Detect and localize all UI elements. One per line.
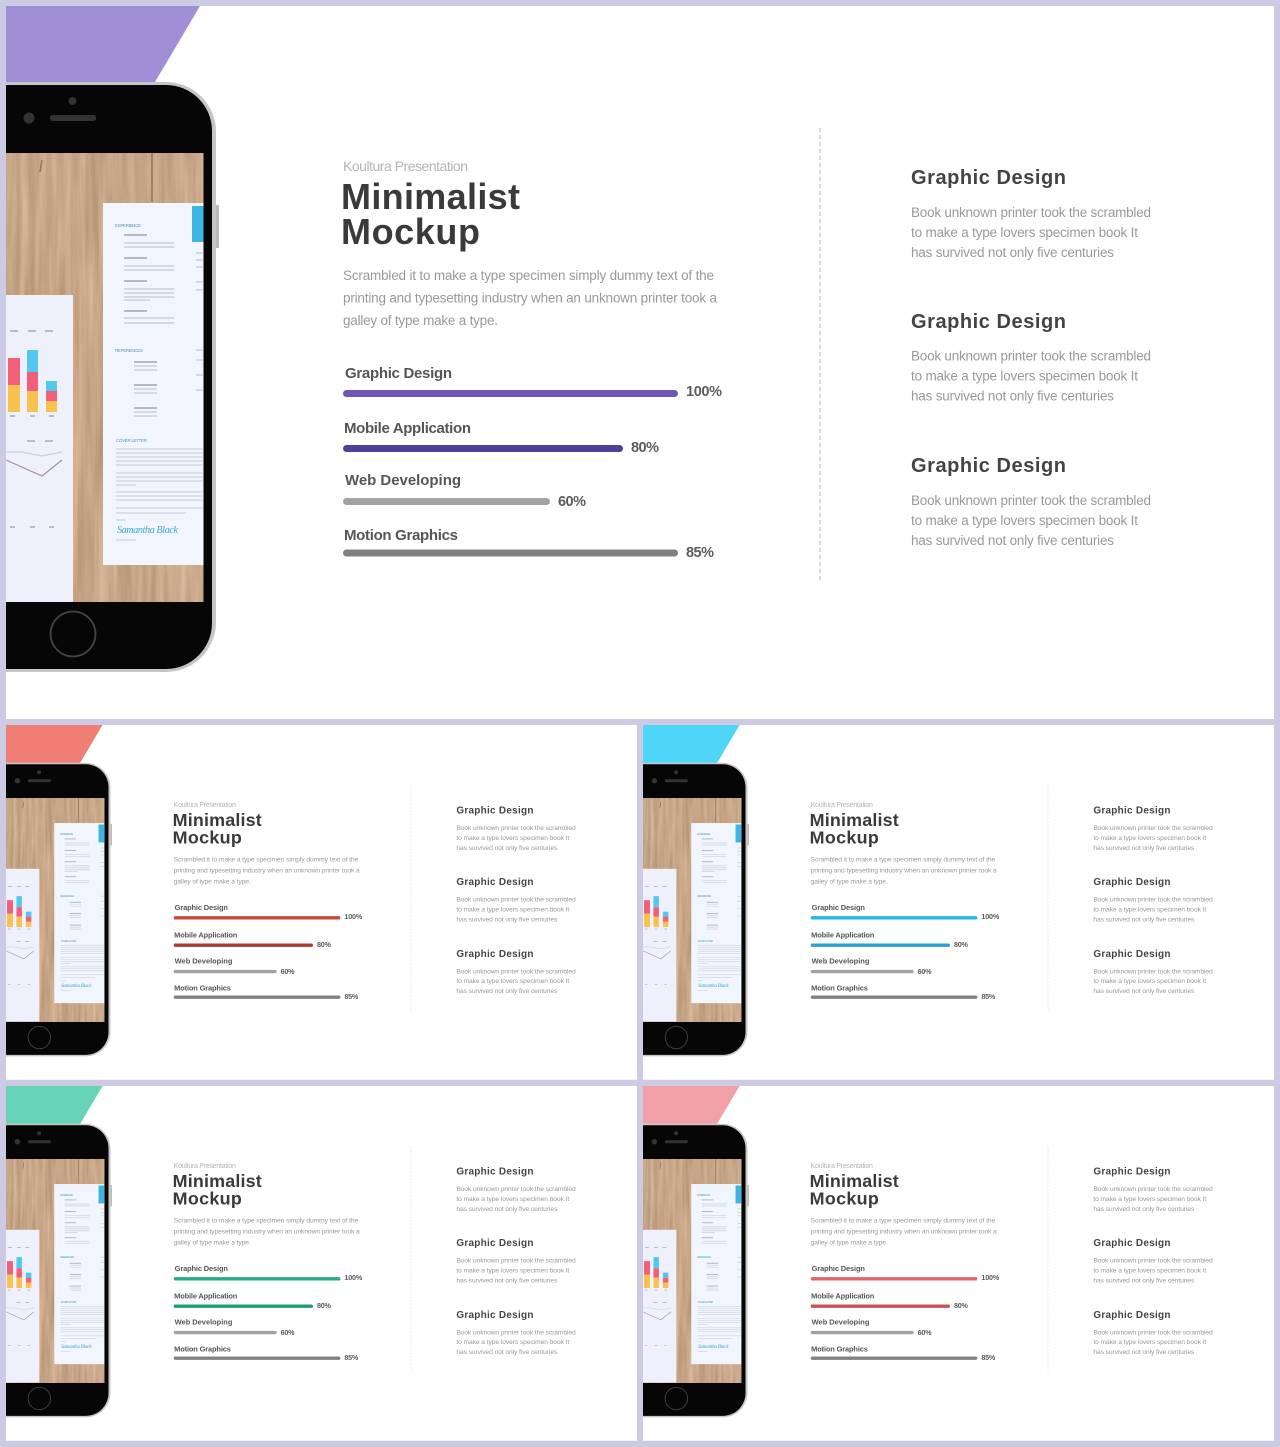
bar: Motion Graphics 85%: Motion Graphics bbox=[811, 984, 868, 993]
text block 3: Book unknown printer took the scrambled bbox=[1093, 1329, 1213, 1336]
bar: Mobile Application 80%: 80% bbox=[317, 1301, 332, 1310]
text block 2: to make a type lovers specimen book It bbox=[911, 368, 1138, 384]
bar: Web Developing 60%: Web Developing bbox=[175, 1317, 233, 1326]
bar: Graphic Design 100%: 100% bbox=[344, 912, 363, 921]
text block 3: Graphic Design bbox=[456, 1310, 533, 1321]
bar: Web Developing 60%: Web Developing bbox=[345, 472, 461, 489]
title bbox=[173, 1171, 262, 1208]
bar: Web Developing 60%: 60% bbox=[281, 967, 295, 976]
intro paragraph bbox=[343, 268, 717, 328]
icon: phone mockup: EXPERIENCE bbox=[60, 1195, 74, 1197]
eyebrow: Koultura Presentation bbox=[174, 802, 236, 809]
text block 1: to make a type lovers specimen book It bbox=[456, 1196, 569, 1203]
bar: Mobile Application 80%: Mobile Application bbox=[174, 930, 238, 939]
bar: Graphic Design 100%: Graphic Design bbox=[175, 903, 228, 912]
text block 2: Graphic Design bbox=[456, 877, 533, 888]
text block 2: has survived not only five centuries bbox=[1093, 1277, 1195, 1284]
text block 3: to make a type lovers specimen book It bbox=[911, 513, 1138, 528]
text block 2 bbox=[456, 1238, 576, 1284]
icon: phone mockup: EXPERIENCE bbox=[60, 834, 74, 836]
icon: phone mockup: Samantha Black bbox=[117, 525, 179, 536]
bar: Motion Graphics 85% bbox=[811, 1345, 996, 1362]
text block 1 bbox=[456, 1167, 576, 1213]
text block 2: Graphic Design bbox=[911, 311, 1066, 333]
icon: phone mockup: EXPERIENCE bbox=[697, 834, 711, 836]
icon: phone mockup: REFERENCES bbox=[60, 896, 75, 898]
icon: phone mockup: COVER LETTER bbox=[61, 941, 77, 943]
title: Mockup bbox=[810, 1188, 879, 1208]
text block 2 bbox=[1093, 877, 1213, 923]
icon: phone mockup: Samantha Black bbox=[698, 1345, 729, 1350]
intro paragraph: galley of type make a type. bbox=[343, 313, 498, 328]
text block 1: Book unknown printer took the scrambled bbox=[911, 205, 1151, 220]
icon: phone mockup bbox=[6, 82, 219, 672]
intro paragraph: printing and typesetting industry when an unknown printer took a bbox=[811, 868, 997, 875]
title: Minimalist bbox=[173, 1171, 262, 1191]
text block 3 bbox=[1093, 1310, 1213, 1356]
bar: Mobile Application 80% bbox=[174, 1291, 332, 1310]
text block 1 bbox=[456, 806, 576, 852]
text block 2: to make a type lovers specimen book It bbox=[1093, 906, 1206, 913]
text block 1: to make a type lovers specimen book It bbox=[1093, 835, 1206, 842]
text block 3: to make a type lovers specimen book It bbox=[456, 978, 569, 985]
text block 1: Book unknown printer took the scrambled bbox=[1093, 1186, 1213, 1193]
chart: skill bars bbox=[174, 903, 363, 1001]
text block 2: Book unknown printer took the scrambled bbox=[1093, 1257, 1213, 1264]
eyebrow: Koultura Presentation bbox=[174, 1163, 236, 1170]
bar: Web Developing 60%: Web Developing bbox=[175, 956, 233, 965]
bar: Motion Graphics 85%: 85% bbox=[344, 1353, 359, 1362]
corner shape: teal bbox=[6, 1086, 103, 1124]
text block 3: Book unknown printer took the scrambled bbox=[456, 968, 576, 975]
text block 3: Book unknown printer took the scrambled bbox=[911, 493, 1151, 508]
icon: phone mockup: COVER LETTER bbox=[116, 438, 148, 443]
text block 2: has survived not only five centuries bbox=[911, 388, 1114, 404]
title: Minimalist bbox=[341, 176, 520, 217]
bar: Graphic Design 100% bbox=[811, 1264, 1000, 1282]
icon: phone mockup: REFERENCES bbox=[697, 1257, 712, 1259]
text block 2: Book unknown printer took the scrambled bbox=[456, 896, 576, 903]
intro paragraph bbox=[174, 1217, 360, 1247]
text block 3: Graphic Design bbox=[1093, 949, 1170, 960]
icon: phone mockup bbox=[643, 1124, 749, 1417]
text block 3: Graphic Design bbox=[456, 949, 533, 960]
bar: Web Developing 60% bbox=[811, 1317, 932, 1337]
bar: Graphic Design 100%: Graphic Design bbox=[175, 1264, 228, 1273]
text block 2: Book unknown printer took the scrambled bbox=[911, 348, 1151, 364]
icon: phone mockup: Samantha Black bbox=[61, 984, 92, 989]
bar: Mobile Application 80%: Mobile Application bbox=[174, 1291, 238, 1300]
icon: phone mockup: COVER LETTER bbox=[698, 941, 714, 943]
intro paragraph: Scrambled it to make a type specimen simply dummy text of the bbox=[343, 268, 714, 283]
text block 1: has survived not only five centuries bbox=[1093, 1206, 1195, 1213]
bar: Motion Graphics 85% bbox=[343, 527, 714, 561]
text block 3: Book unknown printer took the scrambled bbox=[1093, 968, 1213, 975]
text block 1: has survived not only five centuries bbox=[911, 245, 1114, 260]
bar: Mobile Application 80%: 80% bbox=[954, 940, 969, 949]
icon: phone mockup: EXPERIENCE bbox=[697, 1195, 711, 1197]
eyebrow: Koultura Presentation bbox=[343, 158, 468, 174]
text block 2 bbox=[911, 311, 1151, 404]
intro paragraph: galley of type make a type. bbox=[811, 1240, 888, 1247]
icon: phone mockup: REFERENCES bbox=[115, 348, 143, 353]
bar: Web Developing 60% bbox=[343, 472, 586, 510]
intro paragraph: galley of type make a type. bbox=[174, 1240, 251, 1247]
corner shape: pink bbox=[643, 1086, 740, 1124]
title bbox=[810, 1171, 899, 1208]
icon: phone mockup: Samantha Black bbox=[61, 1345, 92, 1350]
bar: Web Developing 60% bbox=[174, 956, 295, 976]
bar: Motion Graphics 85%: Motion Graphics bbox=[174, 1345, 231, 1354]
intro paragraph: galley of type make a type. bbox=[811, 879, 888, 886]
bar: Web Developing 60%: 60% bbox=[918, 967, 932, 976]
text block 3: has survived not only five centuries bbox=[911, 533, 1114, 548]
bar: Mobile Application 80%: 80% bbox=[317, 940, 332, 949]
panel: cyan slide bbox=[643, 725, 1274, 1080]
text block 1 bbox=[1093, 1167, 1213, 1213]
bar: Mobile Application 80%: Mobile Application bbox=[344, 420, 471, 437]
intro paragraph bbox=[174, 856, 360, 886]
bar: Motion Graphics 85%: 85% bbox=[981, 1353, 996, 1362]
text block 1: Book unknown printer took the scrambled bbox=[456, 825, 576, 832]
text block 2: has survived not only five centuries bbox=[456, 1277, 558, 1284]
text block 1: Book unknown printer took the scrambled bbox=[1093, 825, 1213, 832]
bar: Graphic Design 100% bbox=[343, 365, 722, 400]
title bbox=[810, 810, 899, 847]
bar: Motion Graphics 85%: 85% bbox=[981, 992, 996, 1001]
intro paragraph: Scrambled it to make a type specimen simply dummy text of the bbox=[811, 1217, 996, 1224]
text block 2: Graphic Design bbox=[1093, 877, 1170, 888]
chart: skill bars bbox=[811, 1264, 1000, 1362]
text block 1 bbox=[1093, 806, 1213, 852]
text block 3: Book unknown printer took the scrambled bbox=[456, 1329, 576, 1336]
bar: Motion Graphics 85%: Motion Graphics bbox=[174, 984, 231, 993]
bar: Motion Graphics 85% bbox=[174, 984, 359, 1001]
intro paragraph: Scrambled it to make a type specimen simply dummy text of the bbox=[174, 1217, 359, 1224]
eyebrow: Koultura Presentation bbox=[811, 1163, 873, 1170]
bar: Web Developing 60% bbox=[174, 1317, 295, 1337]
bar: Motion Graphics 85%: Motion Graphics bbox=[344, 527, 458, 544]
corner shape: purple bbox=[6, 6, 200, 82]
title: Mockup bbox=[341, 211, 480, 252]
text block 2: has survived not only five centuries bbox=[456, 916, 558, 923]
bar: Mobile Application 80% bbox=[343, 420, 659, 456]
icon: phone mockup bbox=[6, 1124, 112, 1417]
icon: phone mockup: REFERENCES bbox=[60, 1257, 75, 1259]
bar: Motion Graphics 85% bbox=[811, 984, 996, 1001]
text block 3: to make a type lovers specimen book It bbox=[1093, 1339, 1206, 1346]
text block 2: to make a type lovers specimen book It bbox=[456, 1267, 569, 1274]
text block 2: to make a type lovers specimen book It bbox=[456, 906, 569, 913]
intro paragraph bbox=[811, 1217, 997, 1247]
icon: phone mockup bbox=[643, 763, 749, 1056]
text block 2: Book unknown printer took the scrambled bbox=[456, 1257, 576, 1264]
panel: salmon slide bbox=[6, 725, 637, 1080]
text block 1: to make a type lovers specimen book It bbox=[911, 225, 1138, 240]
text block 3 bbox=[456, 949, 576, 995]
bar: Graphic Design 100% bbox=[174, 1264, 363, 1282]
chart: skill bars bbox=[174, 1264, 363, 1362]
bar: Motion Graphics 85% bbox=[174, 1345, 359, 1362]
bar: Mobile Application 80% bbox=[811, 930, 969, 949]
title bbox=[173, 810, 262, 847]
intro paragraph: printing and typesetting industry when an unknown printer took a bbox=[174, 1229, 360, 1236]
text block 1: has survived not only five centuries bbox=[456, 845, 558, 852]
icon: phone mockup bbox=[6, 763, 112, 1056]
title: Mockup bbox=[810, 827, 879, 847]
text block 3 bbox=[456, 1310, 576, 1356]
text block 3: to make a type lovers specimen book It bbox=[456, 1339, 569, 1346]
text block 2: to make a type lovers specimen book It bbox=[1093, 1267, 1206, 1274]
title: Minimalist bbox=[173, 810, 262, 830]
intro paragraph: Scrambled it to make a type specimen simply dummy text of the bbox=[811, 856, 996, 863]
title: Mockup bbox=[173, 827, 242, 847]
text block 3: to make a type lovers specimen book It bbox=[1093, 978, 1206, 985]
bar: Web Developing 60%: 60% bbox=[918, 1328, 932, 1337]
text block 3: has survived not only five centuries bbox=[456, 1349, 558, 1356]
bar: Graphic Design 100% bbox=[174, 903, 363, 921]
bar: Mobile Application 80% bbox=[811, 1291, 969, 1310]
intro paragraph bbox=[811, 856, 997, 886]
title: Minimalist bbox=[810, 1171, 899, 1191]
corner shape: cyan bbox=[643, 725, 740, 763]
text block 3: has survived not only five centuries bbox=[1093, 1349, 1195, 1356]
icon: phone mockup: COVER LETTER bbox=[698, 1302, 714, 1304]
text block 1: has survived not only five centuries bbox=[1093, 845, 1195, 852]
bar: Graphic Design 100%: Graphic Design bbox=[812, 1264, 865, 1273]
intro paragraph: printing and typesetting industry when an unknown printer took a bbox=[343, 290, 717, 306]
title: Mockup bbox=[173, 1188, 242, 1208]
text block 1: has survived not only five centuries bbox=[456, 1206, 558, 1213]
text block 1: Graphic Design bbox=[456, 806, 533, 817]
title bbox=[341, 176, 520, 252]
title: Minimalist bbox=[810, 810, 899, 830]
intro paragraph: Scrambled it to make a type specimen simply dummy text of the bbox=[174, 856, 359, 863]
text block 1: Graphic Design bbox=[456, 1167, 533, 1178]
panel: pink slide bbox=[643, 1086, 1274, 1441]
icon: phone mockup: Samantha Black bbox=[698, 984, 729, 989]
text block 2: has survived not only five centuries bbox=[1093, 916, 1195, 923]
text block 1: Graphic Design bbox=[1093, 806, 1170, 817]
text block 2: Graphic Design bbox=[1093, 1238, 1170, 1249]
bar: Mobile Application 80%: Mobile Application bbox=[811, 1291, 875, 1300]
panel: teal slide bbox=[6, 1086, 637, 1441]
icon: phone mockup: COVER LETTER bbox=[61, 1302, 77, 1304]
text block 1: Book unknown printer took the scrambled bbox=[456, 1186, 576, 1193]
bar: Graphic Design 100% bbox=[811, 903, 1000, 921]
text block 1: to make a type lovers specimen book It bbox=[1093, 1196, 1206, 1203]
text block 1: Graphic Design bbox=[911, 167, 1066, 189]
panel: main purple slide bbox=[6, 6, 1274, 719]
bar: Mobile Application 80%: Mobile Application bbox=[811, 930, 875, 939]
intro paragraph: printing and typesetting industry when an unknown printer took a bbox=[811, 1229, 997, 1236]
text block 2 bbox=[456, 877, 576, 923]
bar: Web Developing 60%: 60% bbox=[558, 494, 586, 510]
bar: Motion Graphics 85%: 85% bbox=[686, 545, 714, 561]
bar: Motion Graphics 85%: Motion Graphics bbox=[811, 1345, 868, 1354]
intro paragraph: galley of type make a type. bbox=[174, 879, 251, 886]
bar: Graphic Design 100%: 100% bbox=[981, 912, 1000, 921]
text block 3: has survived not only five centuries bbox=[1093, 988, 1195, 995]
chart: skill bars bbox=[343, 365, 722, 561]
text block 2 bbox=[1093, 1238, 1213, 1284]
text block 1: Graphic Design bbox=[1093, 1167, 1170, 1178]
text block 3: Graphic Design bbox=[1093, 1310, 1170, 1321]
text block 1: to make a type lovers specimen book It bbox=[456, 835, 569, 842]
bar: Mobile Application 80%: 80% bbox=[954, 1301, 969, 1310]
bar: Graphic Design 100%: 100% bbox=[981, 1273, 1000, 1282]
bar: Web Developing 60%: Web Developing bbox=[812, 1317, 870, 1326]
text block 1 bbox=[911, 167, 1151, 260]
bar: Graphic Design 100%: 100% bbox=[686, 384, 722, 400]
chart: skill bars bbox=[811, 903, 1000, 1001]
bar: Mobile Application 80% bbox=[174, 930, 332, 949]
text block 2: Graphic Design bbox=[456, 1238, 533, 1249]
bar: Motion Graphics 85%: 85% bbox=[344, 992, 359, 1001]
bar: Web Developing 60%: 60% bbox=[281, 1328, 295, 1337]
eyebrow: Koultura Presentation bbox=[811, 802, 873, 809]
bar: Mobile Application 80%: 80% bbox=[631, 440, 659, 456]
bar: Graphic Design 100%: 100% bbox=[344, 1273, 363, 1282]
bar: Web Developing 60%: Web Developing bbox=[812, 956, 870, 965]
icon: phone mockup: EXPERIENCE bbox=[115, 223, 141, 228]
text block 3: has survived not only five centuries bbox=[456, 988, 558, 995]
text block 3 bbox=[1093, 949, 1213, 995]
bar: Web Developing 60% bbox=[811, 956, 932, 976]
corner shape: salmon bbox=[6, 725, 103, 763]
text block 3: Graphic Design bbox=[911, 455, 1066, 477]
bar: Graphic Design 100%: Graphic Design bbox=[345, 365, 452, 382]
icon: phone mockup: REFERENCES bbox=[697, 896, 712, 898]
text block 3 bbox=[911, 455, 1151, 548]
bar: Graphic Design 100%: Graphic Design bbox=[812, 903, 865, 912]
text block 2: Book unknown printer took the scrambled bbox=[1093, 896, 1213, 903]
intro paragraph: printing and typesetting industry when an unknown printer took a bbox=[174, 868, 360, 875]
